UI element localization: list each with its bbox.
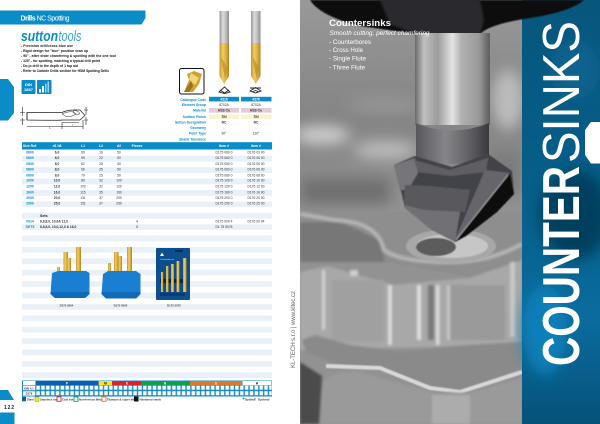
table data rows: 6,0 xyxy=(55,150,59,154)
table data rows: D175 200 0 xyxy=(215,196,233,200)
material legend: Steel xyxy=(27,397,34,401)
table data rows: 25 xyxy=(99,162,103,166)
table data rows: 69 xyxy=(81,150,85,154)
threaded neck xyxy=(416,123,489,164)
brand logo: suttontools: sutton xyxy=(21,28,58,45)
table header row: Pieces xyxy=(132,144,142,148)
table data rows: 37 xyxy=(99,196,103,200)
lip bright edge xyxy=(326,366,522,392)
sets rows: 0014 xyxy=(26,220,34,224)
product captions: D175 0005 xyxy=(114,304,128,308)
drill image 1 xyxy=(220,11,229,84)
icon: rigidity bars xyxy=(37,80,52,94)
material legend: Hardened steels xyxy=(140,397,162,401)
material suitability table xyxy=(22,380,272,396)
feature bullet list: - 120° - for spotting, matching a typical drill point xyxy=(21,59,101,63)
icon: DIN 1897: 1897 xyxy=(24,87,34,92)
photo caption text: - Cross Hole xyxy=(329,47,363,54)
sets rows: Sets xyxy=(40,214,48,218)
table data rows: 50 xyxy=(117,162,121,166)
table data rows: 160 xyxy=(116,190,122,194)
sets rows: SET5 xyxy=(26,225,34,229)
material group colour row: N xyxy=(164,382,167,386)
table data rows: 62 xyxy=(81,162,85,166)
table data rows: 2500 xyxy=(26,202,34,206)
spec row labels: Point Type xyxy=(189,132,206,136)
sets rows: D1 75 5075 xyxy=(215,225,233,229)
spec row labels: Element Group xyxy=(182,103,206,107)
material group colour row: S xyxy=(215,382,217,386)
big vertical title: COUNTERSINKS: COUNTER xyxy=(533,166,591,366)
table header row: Item # xyxy=(219,144,229,148)
table header row: d2 xyxy=(117,144,121,148)
feature bullet list: - Refer to Carbide Drills section for HSM Spotting Drills xyxy=(21,69,109,73)
table data rows: D176 06 00 xyxy=(247,168,265,172)
feature bullet list: - 90° - after drate chamfering & spotting with the one tool xyxy=(21,54,116,58)
table data rows: 37 xyxy=(99,202,103,206)
table row stripes xyxy=(22,156,272,378)
side tab bottom xyxy=(0,412,14,424)
spec column 1: 4316 xyxy=(220,98,228,102)
table data rows: 120 xyxy=(116,184,122,188)
table data rows: D175 050 0 xyxy=(215,162,233,166)
photo caption text: Smooth cutting, perfect chamfering xyxy=(330,30,430,37)
material legend: Non-ferrous Metals xyxy=(79,397,105,401)
table data rows: 200 xyxy=(116,196,122,200)
casting lower lip xyxy=(302,334,522,352)
spec column 2: - xyxy=(255,138,257,142)
spec row labels: Catalogue Code xyxy=(180,98,206,102)
material group colour row: P xyxy=(66,382,69,386)
table data rows: 8,0 xyxy=(55,168,59,172)
material legend: Optimal xyxy=(245,397,256,401)
header bar: Drills NC Spotting xyxy=(0,10,146,24)
product photo: drill set on blue card: Countersink set xyxy=(160,258,174,261)
blue title band xyxy=(522,0,600,424)
spec column 1: 8702A xyxy=(219,103,230,107)
spec column 2: RC xyxy=(254,120,259,124)
feature bullet list: - Rigid design for "true" position scan up xyxy=(21,49,88,53)
white side tab xyxy=(585,122,600,164)
table data rows: 6,0 xyxy=(55,156,59,160)
blurred background highlights xyxy=(294,70,524,204)
table data rows: 0600 xyxy=(26,156,34,160)
table data rows: D175 160 0 xyxy=(215,190,233,194)
material group colour row: M xyxy=(104,382,107,386)
table data rows: 50 xyxy=(117,168,121,172)
spec column 2: TiN xyxy=(253,115,259,119)
material group colour row: H xyxy=(256,382,259,386)
icon: 120 degree point xyxy=(250,88,261,93)
spec column 1: - xyxy=(223,126,225,130)
sets rows: D176 00 04 xyxy=(247,220,265,224)
feature bullet list: - Do jo drill to the depth of 1 top aid xyxy=(21,64,78,68)
table data rows: 8,0 xyxy=(55,162,59,166)
sets rows: 6,8,8,0, 10,0& 12,0 xyxy=(40,220,68,224)
table data rows: D176 20 00 xyxy=(247,196,265,200)
chuck body xyxy=(310,0,584,34)
spec column 1 xyxy=(209,97,239,142)
photo: countersink machining a cast part xyxy=(294,0,600,424)
table data rows: 1200 xyxy=(26,184,34,188)
casting vertical wall xyxy=(300,260,522,350)
sets rows xyxy=(26,214,265,229)
table data rows: 25 xyxy=(99,168,103,172)
table data rows: 151 xyxy=(80,202,86,206)
spec column 1: - xyxy=(223,138,225,142)
table data rows: 0800 xyxy=(26,168,34,172)
shank xyxy=(415,33,490,125)
table data rows: D175 060 0 xyxy=(215,156,233,160)
lower casting body xyxy=(441,391,466,394)
drill dimension diagram xyxy=(20,107,88,130)
spec column 2: 8702A xyxy=(251,103,262,107)
spec column 1: 90° xyxy=(222,132,227,136)
spec row labels xyxy=(175,98,206,142)
table data rows: D176 16 00 xyxy=(247,190,265,194)
table data rows: D176 25 00 xyxy=(247,202,265,206)
table data rows: D176 10 00 xyxy=(247,178,265,182)
sets rows: 5 xyxy=(136,225,138,229)
table data rows: D175 060 0 xyxy=(215,168,233,172)
spec column 1: HSS Co xyxy=(218,109,230,113)
product captions: D175 0004 xyxy=(60,304,74,308)
product photo: drill set on blue card xyxy=(156,248,190,300)
top surface of casting xyxy=(300,212,522,277)
table data rows: 16,0 xyxy=(54,190,60,194)
material group colour row: K xyxy=(126,382,129,386)
sets rows: 6,8,8,0, 10,0,12,0 & 16,0 xyxy=(40,225,76,229)
spec row labels: Geometry xyxy=(190,126,206,130)
photo caption text: Countersinks xyxy=(329,18,391,29)
lower casting base xyxy=(300,212,522,424)
table data rows: 25,0 xyxy=(54,202,60,206)
spec column 1: TiN xyxy=(221,115,227,119)
table data rows: D175 080 0 xyxy=(215,174,233,178)
table data rows: 50 xyxy=(117,150,121,154)
feature bullet list: - Precision drill/cross blue use xyxy=(21,44,73,48)
spec row labels: Material xyxy=(193,108,206,112)
table data rows: 0600 xyxy=(26,150,34,154)
brand logo: suttontools: tools xyxy=(58,28,82,45)
material rating rows: D176 xyxy=(26,392,33,396)
table data rows: D176 12 00 xyxy=(247,184,265,188)
material legend: Titanium & super alloys xyxy=(107,397,139,401)
lower left shadow xyxy=(300,362,322,424)
feature bullet list xyxy=(21,44,116,73)
table data rows: 66 xyxy=(81,168,85,172)
spec column 2 xyxy=(241,97,272,142)
material group colour row xyxy=(36,381,272,386)
table data rows: 50 xyxy=(117,174,121,178)
spec row labels: Sutton Designation xyxy=(175,120,206,124)
table data rows: 10,0 xyxy=(54,178,60,182)
material legend: Stainless steel xyxy=(40,397,60,401)
spec column 2: 120° xyxy=(253,132,260,136)
specification table xyxy=(175,97,272,142)
table data rows: 1600 xyxy=(26,190,34,194)
table data rows: 89 xyxy=(81,178,85,182)
product captions xyxy=(60,304,181,308)
table data rows: 115 xyxy=(80,190,86,194)
table data rows: 79 xyxy=(81,174,85,178)
band photo tint xyxy=(523,40,600,375)
table data rows: 0800 xyxy=(26,174,34,178)
table data rows: 32 xyxy=(99,178,103,182)
table data rows: 32 xyxy=(99,184,103,188)
side tab xyxy=(0,79,14,120)
drill image 2 xyxy=(251,11,260,84)
table data rows: 1000 xyxy=(26,178,34,182)
table header row: Item # xyxy=(251,144,261,148)
material legend xyxy=(22,396,270,402)
table header row: d1 h8 xyxy=(53,144,62,148)
table data rows: 22 xyxy=(99,156,103,160)
spec row labels: Surface Finish xyxy=(183,115,206,119)
table data rows: 0800 xyxy=(26,162,34,166)
table header row xyxy=(22,142,272,150)
hole in casting xyxy=(406,229,496,263)
material legend: Optional xyxy=(258,397,270,401)
table data rows: 2000 xyxy=(26,196,34,200)
material rating rows xyxy=(23,385,272,396)
table data rows: D175 120 0 xyxy=(215,184,233,188)
product photo: drill set in blue block 1 xyxy=(50,247,90,298)
table data rows: 12,0 xyxy=(54,184,60,188)
table data rows: D176 03 00 xyxy=(247,150,265,154)
spec column 2: 4376 xyxy=(252,98,260,102)
table data rows: 95 xyxy=(81,156,85,160)
drill dimension diagram: L xyxy=(49,126,51,130)
vertical website credit: KL-TECH s.r.o | www.kltec.cz xyxy=(290,291,297,368)
casting rim highlight xyxy=(300,214,522,262)
table data rows: D175 250 0 xyxy=(215,202,233,206)
sets rows: 4 xyxy=(136,220,138,224)
icon: DIN 1897: DIN xyxy=(25,82,32,87)
spec column 1: RC xyxy=(222,120,227,124)
material legend: Cast iron xyxy=(62,397,74,401)
table data rows: 50 xyxy=(117,156,121,160)
table header row: Size Ref. xyxy=(23,144,37,148)
table data rows: 102 xyxy=(80,184,86,188)
table data rows: D176 05 00 xyxy=(247,162,265,166)
table header row: L1 xyxy=(81,144,85,148)
icon: DIN 1897 xyxy=(22,80,36,94)
table data rows: D175 060 0 xyxy=(215,150,233,154)
table data rows: 100 xyxy=(116,178,122,182)
product photo: drill set in blue block 2 xyxy=(102,247,140,298)
table header row: L2 xyxy=(99,144,103,148)
spec column 2: - xyxy=(255,126,257,130)
big vertical title: COUNTERSINKS: SINKS xyxy=(533,21,591,163)
wall shadows and ribs xyxy=(322,262,515,345)
drill dimension diagram: l xyxy=(72,123,73,127)
header bar: Drills NC Spotting: Drills NC Spotting xyxy=(20,15,70,22)
icon: 90 degree point xyxy=(219,87,230,94)
sets rows: D175 000 4 xyxy=(215,220,233,224)
photo caption text: - Three Flute xyxy=(329,64,365,72)
table data rows: 20,0 xyxy=(54,196,60,200)
table data rows: 35 xyxy=(99,190,103,194)
table data rows: D176 06 00 xyxy=(247,156,265,160)
inset close-up of drill tip xyxy=(180,68,204,94)
side tab lower xyxy=(0,390,14,400)
material rating rows: DIN 4.1 xyxy=(24,386,34,390)
table data rows: 131 xyxy=(80,196,86,200)
photo caption text xyxy=(329,18,430,72)
spec column 2: HSS Co xyxy=(250,109,262,113)
photo caption text: - Single Flute xyxy=(329,56,366,62)
table data rows: D175 100 0 xyxy=(215,178,233,182)
table data rows: 250 xyxy=(116,202,122,206)
product captions: D175 5075 xyxy=(167,304,181,308)
photo caption text: - Counterbores xyxy=(329,39,372,46)
table data rows: D176 08 00 xyxy=(247,174,265,178)
photo background xyxy=(300,0,522,212)
table data rows: 8,0 xyxy=(55,174,59,178)
page number: 122 xyxy=(4,405,14,411)
countersink head xyxy=(394,154,514,242)
table data rows: 25 xyxy=(99,174,103,178)
table data rows xyxy=(26,150,265,206)
spec row labels: Shank Tolerance xyxy=(179,138,206,142)
table data rows: 16 xyxy=(99,150,103,154)
